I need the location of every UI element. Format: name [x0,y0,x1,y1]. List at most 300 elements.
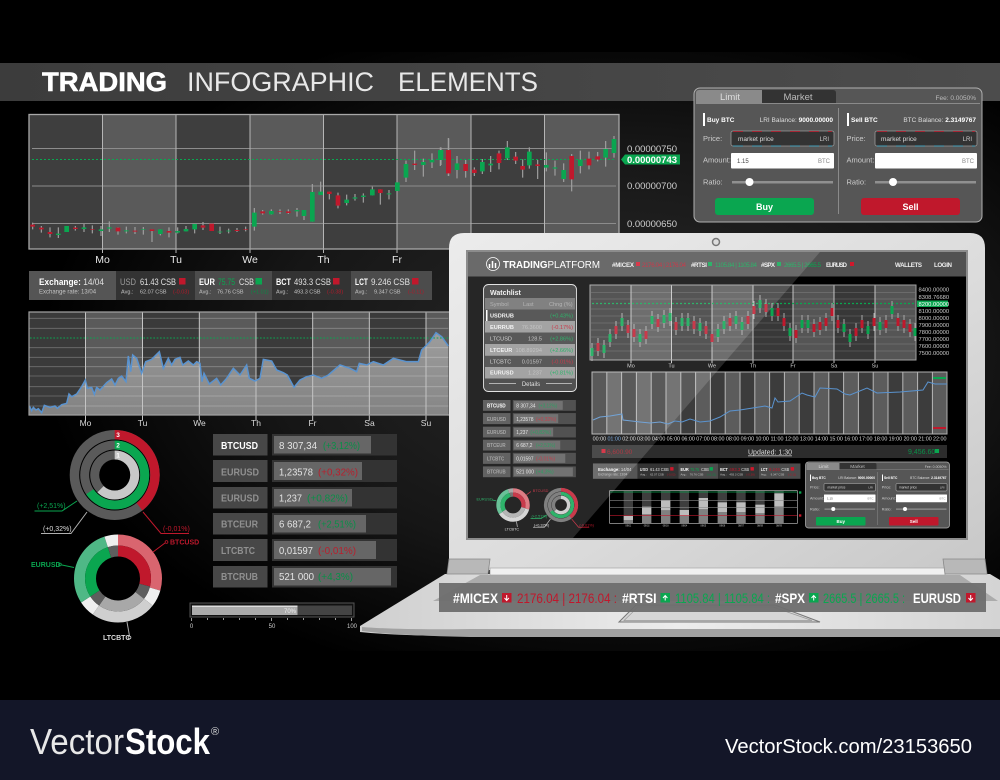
watchlist: (-0.01%) [552,360,573,366]
mini exchange strip: 493.3 [729,467,741,472]
tabs: Market [783,92,813,103]
mini exchange strip: Exchange rate: 13/04 [598,472,628,476]
hour labels: 04:00 [652,436,665,442]
screen header: TRADINGPLATFORM [503,259,600,271]
mini day labels: Sa [831,364,838,370]
panel: pair list: (-0,01%) [318,545,356,557]
screen header: 2176.04 | 2176.04 [642,262,687,269]
watchlist: Details [522,382,540,388]
mini candlestick chart: 8200.00000 [918,302,949,308]
mini pair list: 1,237 [516,430,528,436]
hour labels: 15:00 [829,436,843,442]
watchlist [484,284,576,392]
sell column: LRI [963,137,972,143]
progress gauge [190,603,358,630]
hour labels: 20:00 [903,436,917,442]
watchlist: Last [523,302,534,308]
mini pair list: 8 307,34 [516,404,536,410]
mini exchange strip: 62.07 CSB [650,472,664,476]
hour labels: 11:00 [770,436,784,442]
weekday labels: Sa [364,418,375,428]
laptop base [360,574,1000,637]
mini price scale: 7700.00000 [918,337,949,343]
panel: pair list: (+3,12%) [323,440,360,452]
mini concentric rings: (+0,32%) [534,523,550,527]
panel: pair list: EURUSD [221,466,259,478]
exchange rate strip: 9.246 CSB [371,277,410,287]
exchange rate strip: LCT [355,277,368,287]
panel: pair list: 1,23578 [279,466,313,478]
mini exchange strip: Avg.: [761,472,767,476]
mini exchange strip: 75.75 [690,467,699,472]
mini bar chart: 08/01 [625,525,632,527]
mini order form: market price [899,486,917,490]
mini exchange strip: CSB [781,467,789,472]
panel: pair list: BTCUSD [221,440,258,452]
ticker band [439,583,986,612]
mini order form: Amount: [882,496,896,500]
ring callout: red: (-0,01%) [163,526,190,533]
screen header: LOGIN [934,262,953,269]
mini exchange strip: (-0.11) [788,472,796,476]
mini order form: Fee: 0.0050% [925,465,946,469]
mini order form: BTC [868,496,874,500]
logo: Vector [30,721,124,762]
weekday labels: Tu [138,418,148,428]
ticker band: EURUSD [913,590,961,606]
logo: Stock [125,721,211,762]
mini exchange strip: BCT [720,467,728,472]
day labels [95,254,402,266]
mini exchange strip: Avg.: [720,472,727,476]
price scale [627,144,677,230]
mini price scale: 7900.00000 [918,323,949,329]
mini bar chart: 08/04 [681,525,688,527]
hour labels: 08:00 [726,436,739,442]
mini order form [806,462,950,528]
exchange rate strip: Avg.: [355,290,368,296]
exchange rate strip: (-0.03) [173,290,189,296]
screen header [468,252,966,276]
panel: area line chart [29,312,450,428]
mini day labels: Mo [627,364,635,370]
watchlist: LTCEUR [490,348,512,354]
logo [30,721,219,762]
mini bar chart: 08/07 [738,525,745,527]
sell column: BTC Balance: 2.3149767 [903,117,976,124]
mini exchange strip: 493.3 CSB [729,472,743,476]
watchlist: 128.5 [528,336,542,342]
exchange rate strip: EUR [199,277,215,287]
exchange rate strip: Exchange rate: 13/04 [39,290,97,296]
exchange rate strip: (-0.11) [408,290,424,296]
mini exchange strip: (-0.38) [746,472,755,476]
chart: concentric progress rings [34,430,190,534]
exchange rate strip: Exchange: 14/04 [39,277,104,287]
exchange rate strip: BCT [276,277,291,287]
mini order form: market price [828,486,846,490]
sell column: Amount: [846,156,874,164]
panel: pair list: 8 307,34 [279,440,317,452]
mini day labels: Su [872,364,878,370]
watchlist: (+2.86%) [550,336,573,342]
watchlist: LTCUSD [490,336,512,342]
mini day labels [627,364,878,370]
tabs: Limit [720,92,740,103]
exchange rate strip [29,271,432,300]
sell column: BTC [962,159,975,165]
hour labels: 09:00 [741,436,754,442]
mini order form: Ratio: [810,507,820,511]
mini bar chart: 08/05 [700,525,707,527]
exchange rate strip: (+1.01) [251,290,269,296]
hour labels: 02:00 [622,436,636,442]
mini pair list: (+4,3%) [536,469,554,475]
exchange rate strip: 62.07 CSB [140,290,167,296]
updated status bar: 9,456.60 [908,449,935,456]
mini exchange strip: Avg.: [680,472,687,476]
donut callout: EURUSD [31,562,74,569]
hour labels: 03:00 [637,436,651,442]
ring callout: green [34,501,77,511]
mini concentric rings [531,488,595,527]
mini day labels: Tu [668,364,675,370]
mini pair list: (+0,82%) [530,430,551,436]
mini order form: Sell [910,519,918,524]
watchlist: LTCBTC [490,360,511,366]
day labels: We [242,254,258,266]
laptop lid [449,233,985,570]
price scale: 0.00000750 [627,144,677,155]
chart: concentric progress rings: 1 [116,452,120,460]
exchange rate strip: 9.347 CSB [374,290,401,296]
panel: pair list: (+4,3%) [318,571,353,583]
title text: ELEMENTS [398,67,538,97]
progress gauge: 0 [190,624,194,630]
hour labels: 08:00 [711,436,725,442]
exchange rate strip: CSB [239,277,254,287]
weekday labels: Th [251,418,261,428]
mini exchange strip: CSB [701,467,709,472]
mini day labels: Fr [790,364,796,370]
mini exchange strip: CSB [741,467,749,472]
mini pair list: (+3,12%) [539,404,557,410]
mini price scale: 7800.00000 [918,330,949,336]
weekday labels: Fr [308,418,317,428]
image id: VectorStock.com/23153650 [725,735,972,758]
hour labels: 07:00 [696,436,710,442]
mini order form: Price: [810,486,820,490]
mini order form: Market [850,464,865,470]
buy column: Buy BTC [707,117,735,124]
hour labels: 06:00 [681,436,695,442]
ticker band: 2176.04 | 2176.04 : [517,590,617,606]
exchange rate strip: 75.75 [218,277,235,287]
ticker band: 2665.5 | 2665.5 : [823,590,905,606]
hour labels: 16:00 [844,436,858,442]
mini pair list: (+0,32%) [536,417,556,423]
mini price scale: 8000.00000 [918,316,949,322]
mini exchange strip: USD [640,467,649,472]
current price tag: 0.00000743 [627,155,677,166]
mini pair list: (+2,51%) [536,443,555,449]
donut callout: BTCUSD: BTCUSD [170,540,199,546]
buy column: LRI Balance: 9000.00000 [760,117,833,124]
buy column: Amount: [703,156,731,164]
watchlist: (-0.17%) [552,325,573,331]
mini line chart with hourly columns [592,372,947,442]
mini bar chart: 08/09 [776,525,783,527]
exchange rate strip: USD [120,277,136,287]
mini pair list: (-0,01%) [536,456,555,462]
mini pair list: 0,01597 [516,456,534,462]
weekday labels: We [193,418,206,428]
weekday labels [80,418,431,428]
panel: pair list: LTCBTC [221,545,255,557]
day labels: Fr [392,254,402,266]
mini order form: Ratio: [882,507,892,511]
tabs [696,90,980,214]
exchange rate strip: 493.3 CSB [294,290,321,296]
watchlist: Watchlist [490,290,522,297]
buy column: market price [738,136,774,143]
panel: pair list: 1,237 [279,492,302,504]
mini segmented donut: EURUSD [477,498,493,502]
donut callout: LTCBTC [103,622,131,642]
buy column: Price: [703,134,722,143]
panel: pair list: (+0,82%) [307,492,348,504]
sell column [846,113,977,215]
exchange rate strip: (-0.38) [327,290,343,296]
sell column: market price [881,136,917,143]
mini exchange strip: EUR [680,467,689,472]
mini order form: Limit [818,464,829,470]
weekday labels: Su [421,418,431,428]
footer band [0,700,1000,780]
panel: pair list [213,434,397,588]
watchlist: USDRUB [490,314,514,320]
mini order form: LRI [940,486,945,490]
hour labels: 13:00 [800,436,813,442]
mini exchange strip: LCT [761,467,768,472]
day labels: Mo [95,254,110,266]
panel: pair list: (+0,32%) [318,466,358,478]
hour labels: 19:00 [889,436,902,442]
ticker band: 1105.84 | 1105.84 : [675,590,770,606]
exchange rate strip: 61.43 CSB [140,277,176,287]
mini segmented donut: BTCUSD [533,489,549,493]
watchlist: Symbol [490,302,509,308]
area series [29,312,448,421]
weekday labels: Mo [80,418,92,428]
mini exchange strip: (+1.01) [707,472,716,476]
mini order form: Amount: [810,496,824,500]
title text: INFOGRAPHIC [187,67,374,97]
sell column: Sell [902,202,919,212]
buy column [703,113,834,215]
mini pair list: EURUSD [487,417,506,423]
watchlist: 1.237 [528,370,542,376]
screen header: EURUSD [826,262,848,269]
mini concentric rings: (-0,01%) [579,523,595,527]
hour labels: 18:00 [874,436,887,442]
screen header: #SPX [761,262,776,269]
mini segmented donut [477,489,549,531]
screen header: 2665.5 | 2665.5 [784,262,822,269]
screen glare [468,252,820,538]
hour labels: 05:00 [667,436,680,442]
price scale: 0.00000650 [627,219,677,230]
mini order form: LRI [868,486,873,490]
mini exchange strip: 76.76 CSB [690,472,703,476]
ring callout: gray: (+0,32%) [43,526,72,533]
watchlist: Chng (%) [549,302,573,308]
mini pair list: LTCBTC [487,456,504,462]
buy column: Ratio: [703,178,723,186]
watchlist: 0.01597 [522,360,542,366]
exchange rate strip: 493.3 CSB [294,277,331,287]
progress gauge: 50 [269,624,276,630]
panel: pair list: 0,01597 [279,545,313,557]
mini price scale: 8100.00000 [918,309,949,315]
mini order form: Sell BTC [884,476,898,480]
mini bar chart: 08/02 [644,525,650,527]
screen header: WALLETS [895,262,922,269]
donut callout: EURUSD: EURUSD [31,562,61,569]
exchange rate strip: Avg.: [276,290,289,296]
mini order form: Price: [882,486,891,490]
title text: TRADING [42,67,167,97]
sell column: Price: [846,134,866,143]
title band [0,63,1000,101]
hour labels: 17:00 [859,436,873,442]
mini exchange strip: Avg.: [640,472,647,476]
mini exchange strip: (-0.03) [667,472,675,476]
chart: concentric progress rings: 2 [116,442,120,450]
hour labels: 14:00 [815,436,828,442]
updated status bar: 6,600.90 [607,449,633,456]
mini candlestick chart [590,285,949,370]
watchlist: (+2.66%) [550,348,573,354]
buy column: BTC [818,159,831,165]
mini price scale [918,288,949,357]
panel: pair list: (+2,51%) [318,518,356,530]
ticker band: #RTSI [622,590,656,606]
screen header: 1105.84 | 1105.84 [715,262,758,269]
title text [42,67,538,97]
buy column: 1.15 [737,159,749,165]
panel: pair list: 521 000 [279,571,314,583]
hour labels: 22:00 [933,436,947,442]
updated status bar: Updated: 1:30 [748,450,792,456]
mini bar chart: 08/06 [719,525,726,527]
mini pair list: BTCUSD [487,404,506,410]
watchlist: 108.89294 [516,348,542,354]
panel: pair list: BTCEUR [221,518,258,530]
exchange rate strip: 76.76 CSB [217,290,244,296]
panel: pair list: 6 687,2 [279,518,311,530]
hour labels: 21:00 [918,436,932,442]
day labels: Th [317,254,330,266]
mini pair list: 1,23578 [516,417,534,423]
watchlist: EURRUB [490,325,514,331]
watchlist: (+0.81%) [550,370,573,376]
day labels: Tu [170,254,182,266]
mini exchange strip: 9.246 [769,467,780,472]
sell column: Sell BTC [851,117,878,124]
mini pair list [483,400,576,477]
hinge right [943,559,987,574]
mini order form: LRI Balance: 9000.00000 [838,476,875,480]
hour labels: 10:00 [755,436,769,442]
mini price scale: 7500.00000 [918,351,949,357]
mini day labels: We [708,364,716,370]
buy column: LRI [820,137,829,143]
ring callout: red [143,512,190,534]
donut callout: BTCUSD [153,540,199,552]
chart: segmented donut [31,540,199,642]
hinge left [447,559,490,574]
donut callout: LTCBTC: LTCBTC [103,635,130,642]
updated status bar [592,445,947,458]
mini exchange strip: Exchange: 14/04 [598,467,632,472]
mini price scale: 8308.76680 [918,295,949,301]
tabs: Fee: 0.0050% [936,95,976,102]
panel: candlestick chart [29,114,680,266]
mini exchange strip: 61.43 CSB [650,467,669,472]
mini order form: BTC Balance: 2.3149767 [910,476,947,480]
exchange rate strip: Avg.: [199,290,212,296]
webcam [712,238,720,246]
ticker band: #SPX [775,590,806,606]
watchlist: 76.3600 [522,325,542,331]
mini exchange strip [593,463,800,479]
mini exchange strip: 9.347 CSB [771,472,784,476]
screen header: #MICEX [612,262,635,269]
screen [467,251,967,539]
mini concentric rings: (+2,51%) [531,515,548,519]
chart: concentric progress rings: 3 [116,432,120,439]
laptop [360,233,1000,637]
buy column: Buy [756,202,773,212]
mini order form: Buy [836,519,845,524]
ring callout: gray [41,512,87,534]
hour labels: 01:00 [607,436,621,442]
candles [33,138,448,242]
hour labels [593,436,947,442]
mini order form: 1.15 [827,496,833,500]
mini day labels: Th [750,364,756,370]
exchange rate strip: Avg.: [121,290,134,296]
hour labels: 00:00 [593,436,606,442]
mini price scale: 7600.00000 [918,344,949,350]
mini segmented donut: LTCBTC [505,527,519,531]
panel: pair list: EURUSD [221,492,259,504]
logo: ® [211,726,219,738]
progress gauge: 70% [284,609,297,615]
ring callout: green: (+2,51%) [37,503,66,510]
mini bar chart [610,491,801,527]
hour labels: 12:00 [785,436,799,442]
mini pair list: EURUSD [487,430,506,436]
mini order form: BTC [940,496,946,500]
panel: order form [694,88,982,222]
mini bar chart: 08/08 [757,525,764,527]
mini order form: Buy BTC [812,476,826,480]
price scale: 0.00000700 [627,181,677,192]
mini bar chart: 08/03 [663,525,669,527]
mini pair list: BTCRUB [487,469,506,475]
